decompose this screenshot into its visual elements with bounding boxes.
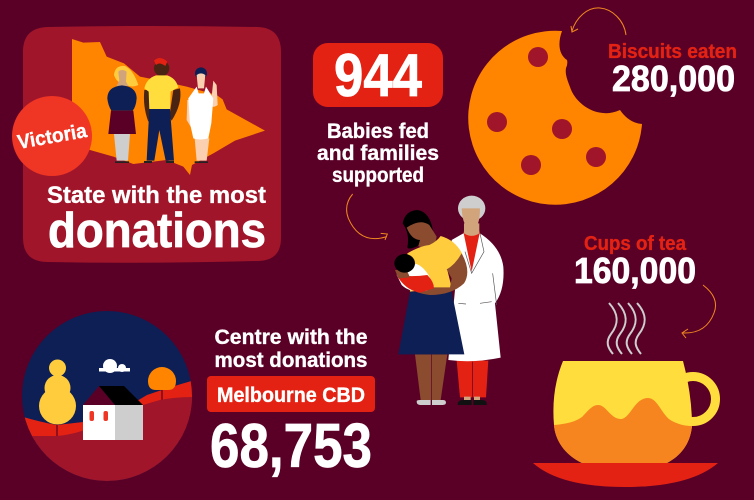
number: 160,000: 160,000 — [574, 250, 696, 291]
panel: centre with the most donations — [20, 310, 375, 482]
icon: yellow tree — [39, 360, 76, 424]
label: Melbourne CBD — [207, 376, 375, 412]
arrow: to cookie — [571, 8, 626, 35]
text: babies fed and families supported: and families — [317, 142, 439, 165]
icon: cookie — [468, 31, 642, 205]
baby — [394, 254, 434, 293]
figure: woman in white dress — [187, 67, 218, 163]
text: babies fed and families supported: Babies fed — [327, 120, 429, 143]
arrow: to cup — [682, 285, 716, 338]
figure: mother — [394, 210, 467, 405]
figure: doctor — [448, 196, 504, 405]
stat: 944 babies — [313, 42, 443, 187]
figures: three women — [107, 58, 218, 163]
icon: cloud — [99, 359, 130, 373]
icon: teacup and saucer — [533, 361, 718, 487]
panel: cups of tea — [533, 233, 718, 487]
label: biscuits eaten: Biscuits eaten — [608, 41, 737, 63]
illustration: landscape with house — [20, 310, 195, 482]
number: 68,753: 68,753 — [210, 412, 372, 481]
panel: biscuits eaten — [468, 8, 737, 205]
pill: 944: 944 — [334, 42, 423, 109]
text: babies fed and families supported — [317, 120, 439, 187]
arrow: to mother and doctor — [347, 194, 387, 240]
icon: orange tree — [148, 367, 176, 390]
figure: woman in navy top — [107, 66, 138, 163]
map of Victoria — [72, 39, 265, 175]
text: centre with the most donations: most donations — [214, 349, 368, 372]
number: 280,000: 280,000 — [612, 58, 735, 99]
heading: state with the most: State with the most — [47, 182, 266, 209]
label: cups of tea: Cups of tea — [584, 233, 687, 255]
text: babies fed and families supported: supported — [332, 164, 424, 187]
icon: house — [83, 386, 143, 440]
icon: steam — [608, 303, 645, 354]
figure: man in yellow shirt — [144, 58, 181, 163]
illustration: mother, baby and doctor — [394, 196, 504, 405]
badge: Victoria: Victoria — [16, 120, 89, 154]
text: centre with the most donations: Centre with the — [214, 326, 368, 349]
cookie chips — [487, 47, 606, 175]
badge: Victoria — [12, 96, 92, 176]
text: centre with the most donations — [214, 326, 368, 372]
label: Melbourne CBD: Melbourne CBD — [217, 384, 365, 407]
heading: donations: donations — [48, 204, 266, 258]
panel: state with the most donations — [12, 26, 281, 263]
